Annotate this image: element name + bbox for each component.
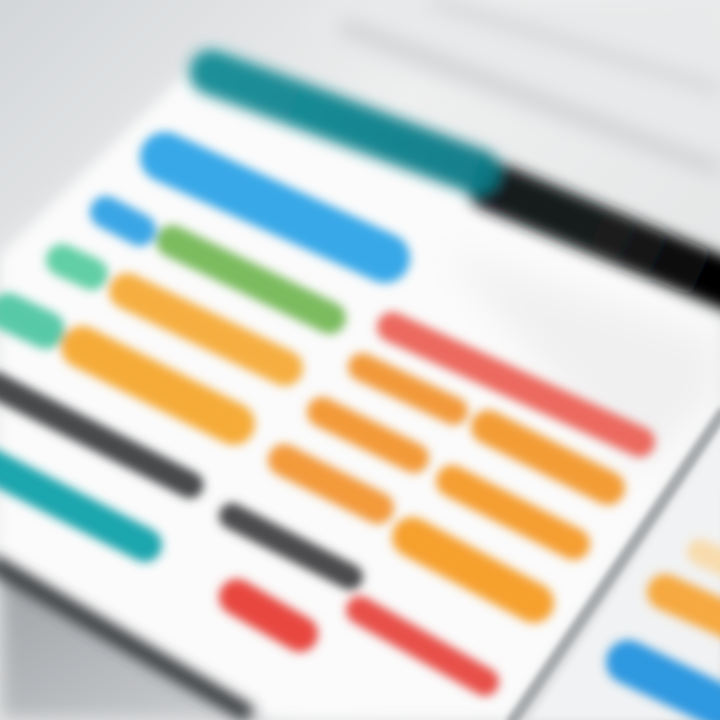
bar: orange row 1 bbox=[127, 291, 285, 368]
bar: blue corner bbox=[628, 662, 720, 716]
bar: long red lower bbox=[360, 610, 485, 682]
bar: orange r1 left bbox=[362, 367, 454, 411]
background sheet: top right bbox=[300, 0, 720, 190]
bar: orange r2 right bbox=[452, 481, 574, 544]
bar: orange r3 left bbox=[284, 460, 378, 508]
bar: small red bbox=[237, 597, 300, 634]
paper lower edge shadow bbox=[0, 562, 250, 715]
bars bbox=[0, 157, 720, 716]
bar: large blue bbox=[165, 157, 385, 258]
bar: green bbox=[172, 241, 330, 318]
bar: dark grey left bbox=[0, 385, 190, 485]
bar: orange r3 right bbox=[412, 537, 534, 603]
bar: orange corner bbox=[665, 592, 720, 626]
bar: black header bbox=[492, 186, 720, 302]
bar: teal header bbox=[212, 72, 478, 172]
upper bars bbox=[212, 72, 720, 302]
bar: pale orange corner bbox=[700, 552, 720, 570]
bar: mint row 2 bbox=[8, 312, 46, 330]
second sheet: bottom right bbox=[530, 425, 720, 720]
bar: orange r2 left bbox=[322, 412, 414, 458]
bar: long red upper bbox=[392, 327, 640, 442]
paper right edge bbox=[510, 410, 720, 720]
bar: orange r1 right bbox=[488, 427, 608, 488]
bar: dark grey centre bbox=[232, 516, 350, 577]
bar: teal lower bbox=[0, 465, 145, 545]
bar: small blue bbox=[106, 212, 140, 230]
bar: orange row 2 bbox=[82, 347, 234, 424]
bar: small mint bbox=[62, 260, 92, 274]
